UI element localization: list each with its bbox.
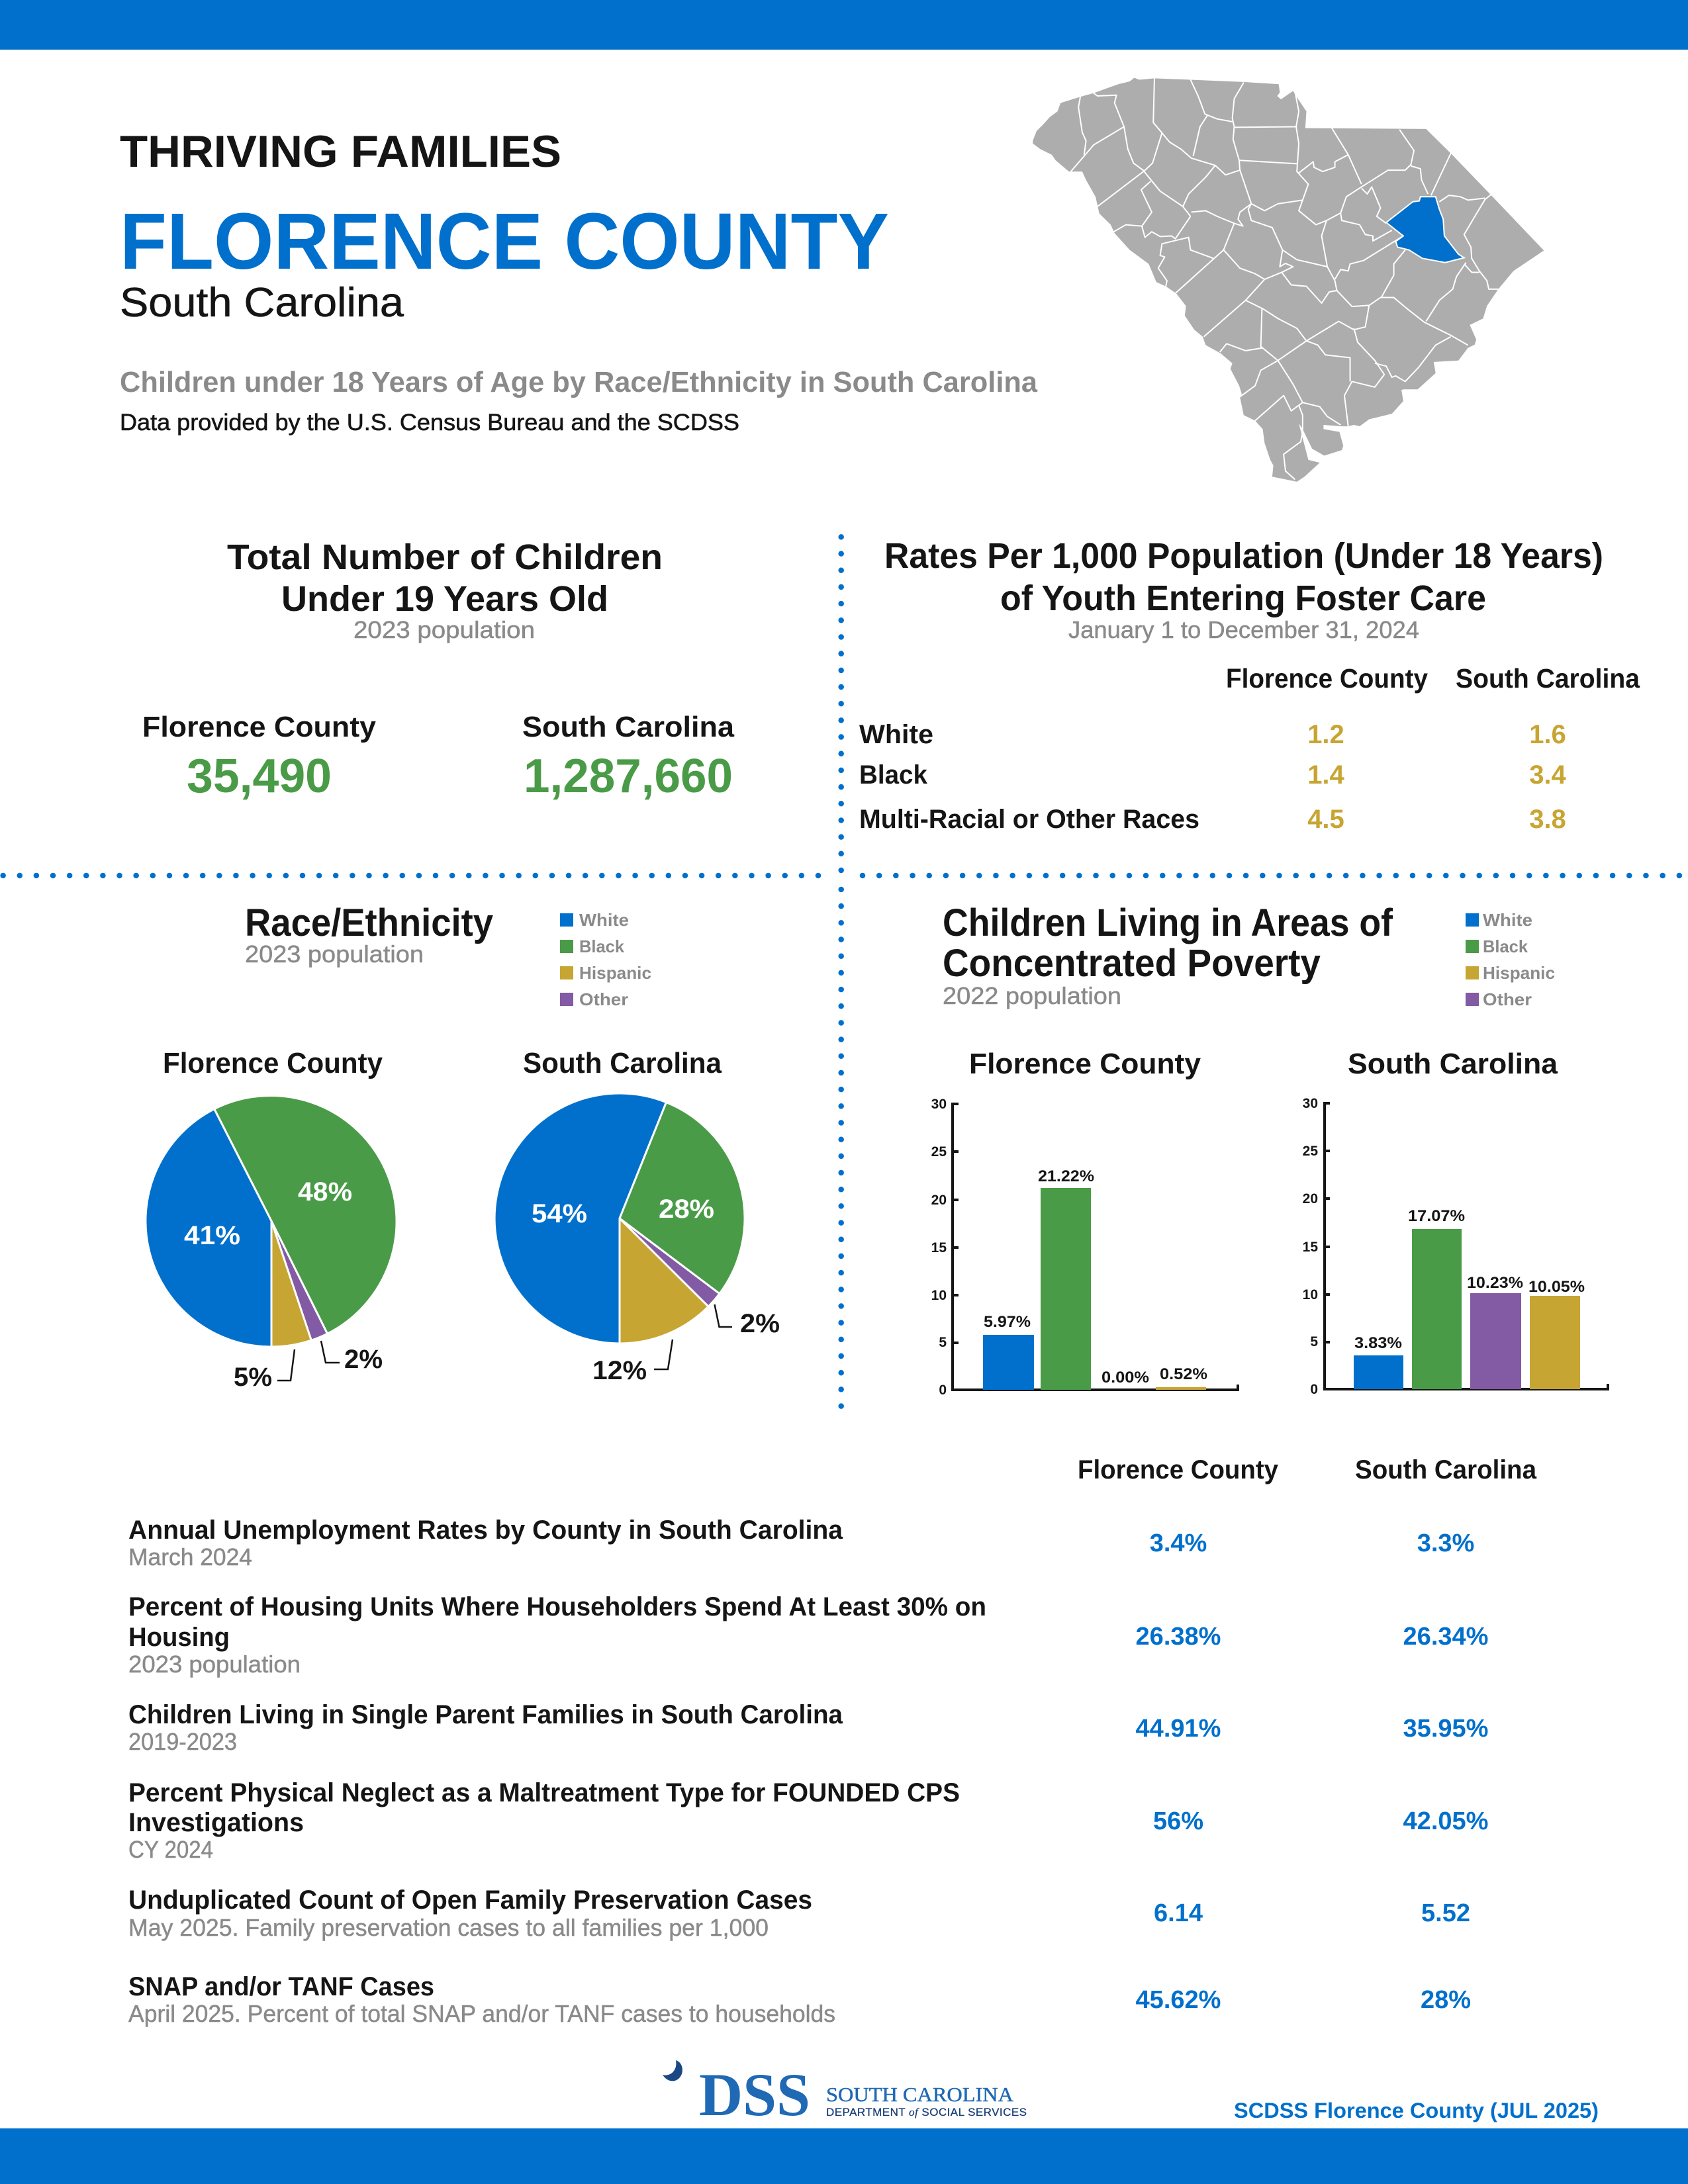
pie chart: South Carolina xyxy=(494,1047,780,1385)
bar chart: Florence County: 0 xyxy=(939,1383,947,1398)
row: physical neglect: CY 2024 xyxy=(128,1836,213,1863)
pie chart: South Carolina: 2% xyxy=(740,1309,780,1338)
row: unemployment: March 2024 xyxy=(128,1543,252,1570)
title: Thriving Families: THRIVING FAMILIES xyxy=(120,126,561,177)
bar chart: South Carolina: 10.23% xyxy=(1467,1274,1523,1292)
description: Children under 18 Years of Age by Race/Ethnicity in South Carolina xyxy=(120,366,1038,398)
florence stat: Florence County xyxy=(142,711,377,743)
column headers: Florence County xyxy=(1226,663,1428,694)
bar chart: South Carolina: South Carolina xyxy=(1348,1048,1558,1080)
pie chart: Florence County: 5% xyxy=(234,1363,272,1392)
footer note: SCDSS Florence County (JUL 2025) xyxy=(1234,2099,1599,2122)
top banner xyxy=(0,0,1688,50)
bar chart: Florence County: 25 xyxy=(931,1144,947,1160)
panel: race and ethnicity xyxy=(146,901,780,1392)
row: family preservation: 5.52 xyxy=(1421,1899,1470,1927)
row: housing: Percent of Housing Units Where Householders Spend At Least 30% on xyxy=(128,1592,986,1621)
pie chart: South Carolina: 28% xyxy=(659,1195,714,1224)
panel: total number of children xyxy=(142,537,735,803)
bar chart: Florence County xyxy=(931,1048,1238,1398)
icon: crescent moon xyxy=(663,2060,682,2081)
pie chart: Florence County: 2% xyxy=(344,1345,383,1374)
panel: total number of children: 35,490 xyxy=(187,750,332,803)
pie chart: Florence County: 48% xyxy=(298,1177,352,1206)
row: physical neglect: Percent Physical Neglect as a Maltreatment Type for FOUNDED CPS xyxy=(128,1778,960,1807)
row: housing xyxy=(128,1592,1488,1678)
legend: Black xyxy=(579,936,625,956)
row: unemployment: 3.4% xyxy=(1150,1529,1207,1557)
row: physical neglect: Investigations xyxy=(128,1808,304,1837)
note: 2022 population xyxy=(943,982,1121,1009)
bar chart: South Carolina: 10.05% xyxy=(1528,1278,1585,1296)
bar chart: Florence County: 21.22% xyxy=(1038,1167,1094,1185)
panel: foster care rates: South Carolina xyxy=(1456,663,1640,694)
panel: foster care rates: 1.4 xyxy=(1307,760,1345,790)
bottom banner xyxy=(0,2128,1688,2184)
panel: foster care rates: 3.4 xyxy=(1529,760,1567,790)
note: January 1 to December 31, 2024 xyxy=(1068,616,1419,643)
bar chart: Florence County: 30 xyxy=(931,1097,947,1112)
pie chart: Florence County xyxy=(146,1047,397,1392)
logo: SC DSS: SOUTH CAROLINA xyxy=(826,2083,1014,2106)
row: single parent families: 44.91% xyxy=(1136,1715,1221,1743)
row: housing: 26.34% xyxy=(1403,1623,1488,1651)
panel: foster care rates xyxy=(859,536,1640,834)
row: single parent families xyxy=(128,1700,1488,1755)
pie chart: Florence County: Florence County xyxy=(163,1047,383,1079)
bar chart: South Carolina: 25 xyxy=(1303,1144,1318,1159)
bar chart: South Carolina: 20 xyxy=(1303,1191,1318,1206)
bar chart: Florence County: 5.97% xyxy=(984,1313,1031,1331)
bar chart: South Carolina: 10 xyxy=(1303,1287,1318,1302)
row: single parent families: 2019-2023 xyxy=(128,1728,237,1755)
data source: Data provided by the U.S. Census Bureau and the SCDSS xyxy=(120,410,739,435)
row: unemployment: 3.3% xyxy=(1417,1529,1474,1557)
row: single parent families: Children Living in Single Parent Families in South Carolina xyxy=(128,1700,843,1729)
bar chart: South Carolina: 15 xyxy=(1303,1240,1318,1255)
panel: concentrated poverty xyxy=(931,901,1608,1398)
table: county indicators xyxy=(128,1455,1537,2027)
bar chart: Florence County: 10 xyxy=(931,1288,947,1303)
row: SNAP and TANF: 28% xyxy=(1421,1986,1471,2014)
logo: SC DSS: DEPARTMENT of SOCIAL SERVICES xyxy=(826,2106,1027,2118)
legend xyxy=(1466,910,1555,1009)
row: housing: 2023 population xyxy=(128,1651,301,1678)
panel: foster care rates: 4.5 xyxy=(1307,805,1344,834)
bar chart: Florence County: 0.52% xyxy=(1160,1365,1207,1383)
panel: concentrated poverty: Concentrated Poverty xyxy=(943,942,1321,985)
heading: Children Living in Areas of xyxy=(943,901,1393,944)
row: physical neglect: 42.05% xyxy=(1403,1807,1488,1835)
bar chart: South Carolina: 5 xyxy=(1310,1334,1318,1349)
heading: Race/Ethnicity xyxy=(245,901,493,944)
row: housing: Housing xyxy=(128,1623,230,1652)
row: family preservation xyxy=(128,1886,1470,1941)
bar chart: South Carolina: 3.83% xyxy=(1354,1334,1402,1352)
heading: Rates Per 1,000 Population (Under 18 Years) xyxy=(884,536,1603,576)
pie chart: Florence County: 41% xyxy=(184,1221,240,1250)
row: single parent families: 35.95% xyxy=(1403,1715,1488,1743)
panel: total number of children: Under 19 Years Old xyxy=(281,579,608,619)
bar chart: Florence County: Florence County xyxy=(969,1048,1201,1080)
row: unemployment: Annual Unemployment Rates by County in South Carolina xyxy=(128,1516,843,1545)
bar chart: Florence County: 20 xyxy=(931,1193,947,1208)
note: 2023 population xyxy=(245,940,424,968)
panel: foster care rates: 3.8 xyxy=(1529,805,1566,834)
dotted dividers xyxy=(2,535,1685,1408)
logo: SC DSS xyxy=(663,2060,1027,2128)
bar chart: Florence County: 0.00% xyxy=(1102,1369,1149,1387)
pie chart: South Carolina: South Carolina xyxy=(523,1047,722,1079)
row: family preservation: Unduplicated Count of Open Family Preservation Cases xyxy=(128,1886,812,1915)
panel: foster care rates: 1.6 xyxy=(1529,720,1566,749)
legend: Hispanic xyxy=(579,963,651,983)
table: county indicators: South Carolina xyxy=(1355,1455,1537,1484)
row: SNAP and TANF xyxy=(128,1972,1471,2027)
panel: foster care rates: of Youth Entering Foster Care xyxy=(1000,578,1486,618)
panel: foster care rates: Multi-Racial or Other Races xyxy=(859,805,1199,834)
row: housing: 26.38% xyxy=(1136,1623,1221,1651)
column headers: Florence County xyxy=(1078,1455,1279,1484)
bar chart: Florence County: 15 xyxy=(931,1240,947,1255)
row: SNAP and TANF: April 2025. Percent of total SNAP and/or TANF cases to households xyxy=(128,2000,835,2027)
legend: Other xyxy=(579,989,628,1009)
row: family preservation: May 2025. Family preservation cases to all families per 1,000 xyxy=(128,1914,769,1941)
title: Florence County: FLORENCE COUNTY xyxy=(120,196,889,286)
row: physical neglect: 56% xyxy=(1153,1807,1203,1835)
map: South Carolina counties xyxy=(1033,77,1544,482)
row labels: White xyxy=(859,720,933,749)
panel: total number of children: 1,287,660 xyxy=(524,750,733,803)
state stat: South Carolina xyxy=(522,711,735,743)
legend: Other xyxy=(1483,989,1532,1009)
subtitle: South Carolina: South Carolina xyxy=(120,280,404,326)
legend: Hispanic xyxy=(1483,963,1555,983)
row: SNAP and TANF: 45.62% xyxy=(1136,1986,1221,2014)
panel: foster care rates: Black xyxy=(859,760,928,790)
bar chart: South Carolina: 30 xyxy=(1303,1096,1318,1111)
bar chart: South Carolina: 0 xyxy=(1310,1382,1318,1397)
row values: 1.2 xyxy=(1307,720,1344,749)
row: family preservation: 6.14 xyxy=(1154,1899,1203,1927)
note: 2023 population xyxy=(353,616,535,643)
row: unemployment xyxy=(128,1516,1474,1570)
logo: SC DSS: DSS xyxy=(699,2061,810,2128)
bar chart: South Carolina: 17.07% xyxy=(1408,1207,1465,1225)
legend xyxy=(560,910,651,1009)
row: physical neglect xyxy=(128,1778,1488,1863)
row: SNAP and TANF: SNAP and/or TANF Cases xyxy=(128,1972,434,2001)
legend: White xyxy=(1483,910,1532,930)
header titles xyxy=(120,126,1038,435)
legend: White xyxy=(579,910,629,930)
heading: Total Number of Children xyxy=(227,537,663,577)
legend: Black xyxy=(1483,936,1528,956)
bar chart: South Carolina xyxy=(1303,1048,1608,1397)
bar chart: Florence County: 5 xyxy=(939,1335,947,1350)
pie chart: South Carolina: 54% xyxy=(532,1199,587,1228)
pie chart: South Carolina: 12% xyxy=(592,1356,647,1385)
